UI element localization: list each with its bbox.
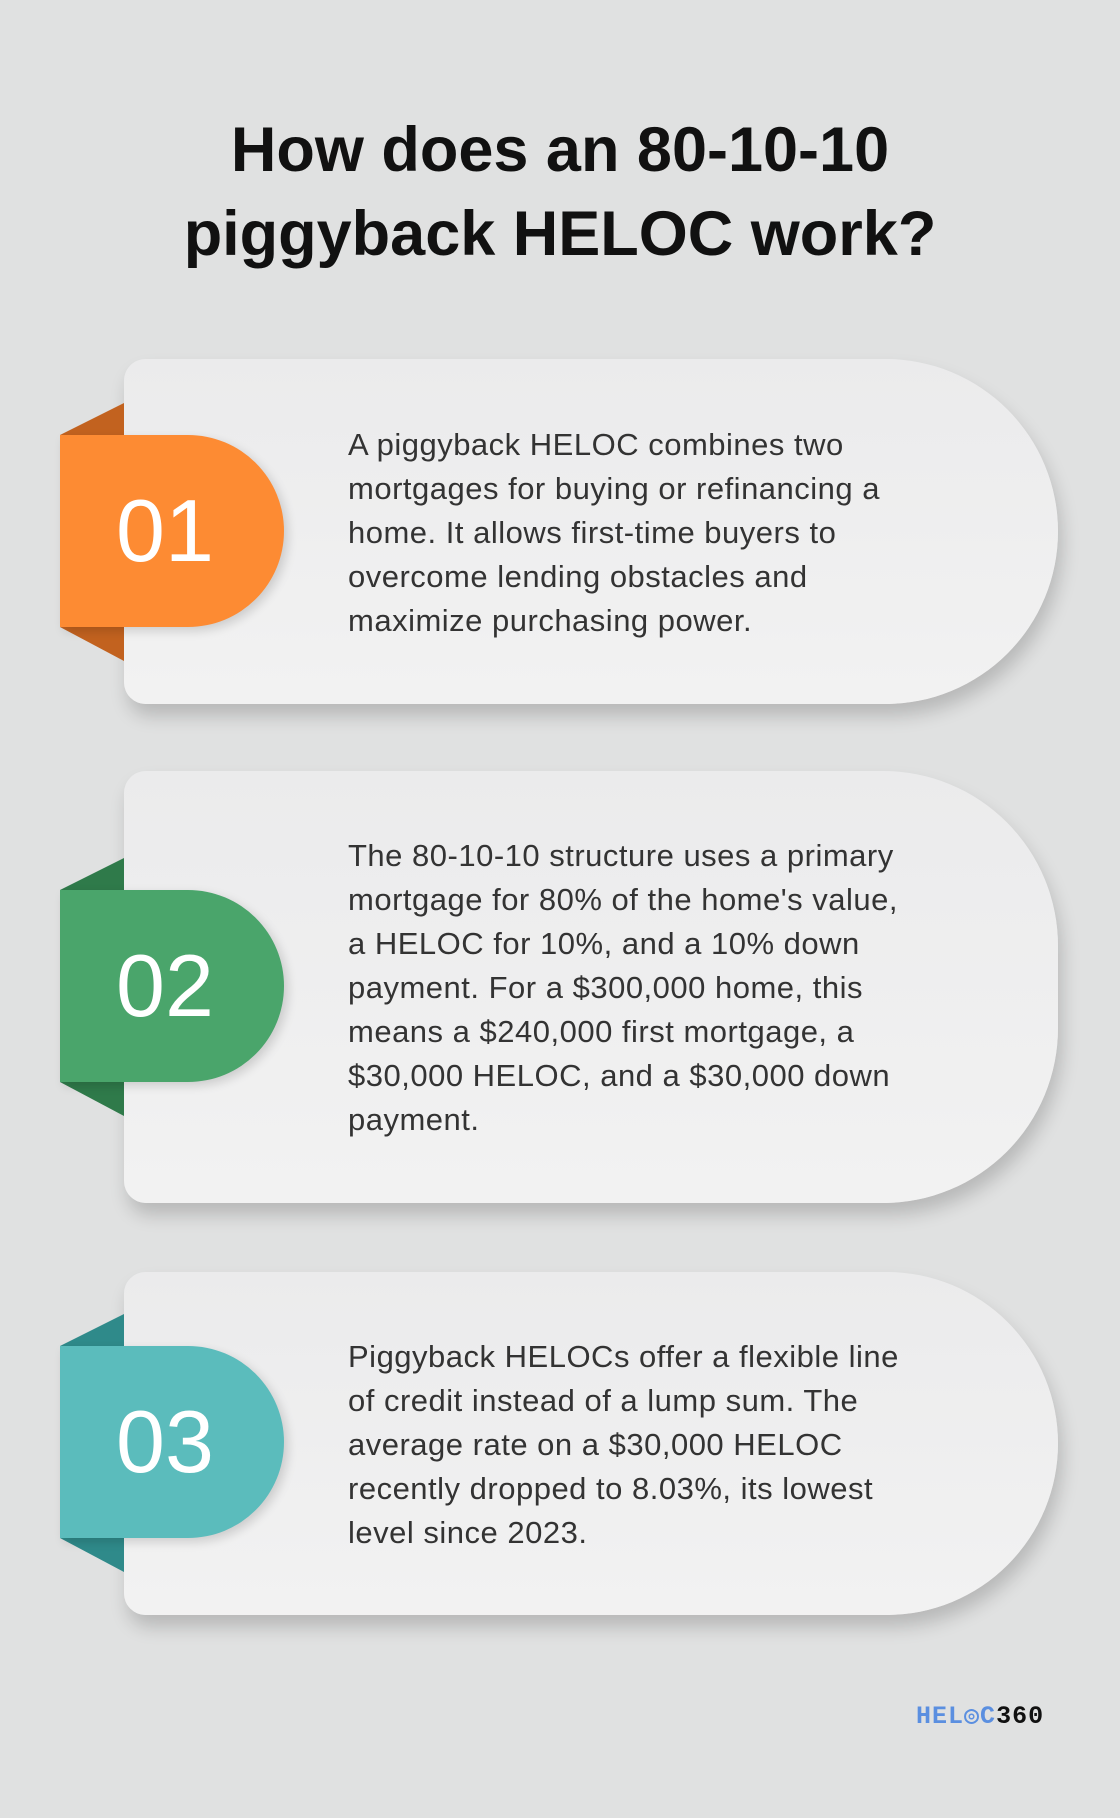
text 3: recently dropped to 8.03%, its lowest <box>348 1471 873 1506</box>
text 2: payment. For a $300,000 home, this <box>348 970 863 1005</box>
text 2: a HELOC for 10%, and a 10% down <box>348 926 860 961</box>
fold 2 <box>60 858 124 1116</box>
card 1 <box>124 359 1058 704</box>
text 3: level since 2023. <box>348 1515 587 1550</box>
badge 02 <box>60 890 284 1082</box>
title: piggyback HELOC work? <box>184 199 936 269</box>
text 2: means a $240,000 first mortgage, a <box>348 1014 854 1049</box>
title <box>184 115 936 269</box>
card 2 <box>124 771 1058 1203</box>
badge 03 <box>60 1346 284 1538</box>
text 2: $30,000 HELOC, and a $30,000 down <box>348 1058 890 1093</box>
text 2 <box>348 838 898 1137</box>
badge 01: 01 <box>116 481 214 580</box>
text 1: mortgages for buying or refinancing a <box>348 471 880 506</box>
text 3: average rate on a $30,000 HELOC <box>348 1427 843 1462</box>
badge 02: 02 <box>116 936 214 1035</box>
panel: step 3 <box>60 1272 1069 1634</box>
logo: HEL◎C360 <box>916 1702 1044 1731</box>
text 2: payment. <box>348 1102 480 1137</box>
panel: step 1 <box>60 359 1069 723</box>
panel: step 2 <box>60 771 1069 1222</box>
fold 1 <box>60 403 124 661</box>
text 1: home. It allows first-time buyers to <box>348 515 836 550</box>
text 2: mortgage for 80% of the home's value, <box>348 882 898 917</box>
text 1 <box>348 427 880 638</box>
text 3 <box>348 1339 899 1550</box>
text 1: A piggyback HELOC combines two <box>348 427 844 462</box>
badge 01 <box>60 435 284 627</box>
fold 3 <box>60 1314 124 1572</box>
text 3: Piggyback HELOCs offer a flexible line <box>348 1339 899 1374</box>
title: How does an 80-10-10 <box>231 115 889 185</box>
text 3: of credit instead of a lump sum. The <box>348 1383 858 1418</box>
card 3 <box>124 1272 1058 1615</box>
text 1: overcome lending obstacles and <box>348 559 808 594</box>
text 2: The 80-10-10 structure uses a primary <box>348 838 894 873</box>
badge 03: 03 <box>116 1392 214 1491</box>
text 1: maximize purchasing power. <box>348 603 752 638</box>
